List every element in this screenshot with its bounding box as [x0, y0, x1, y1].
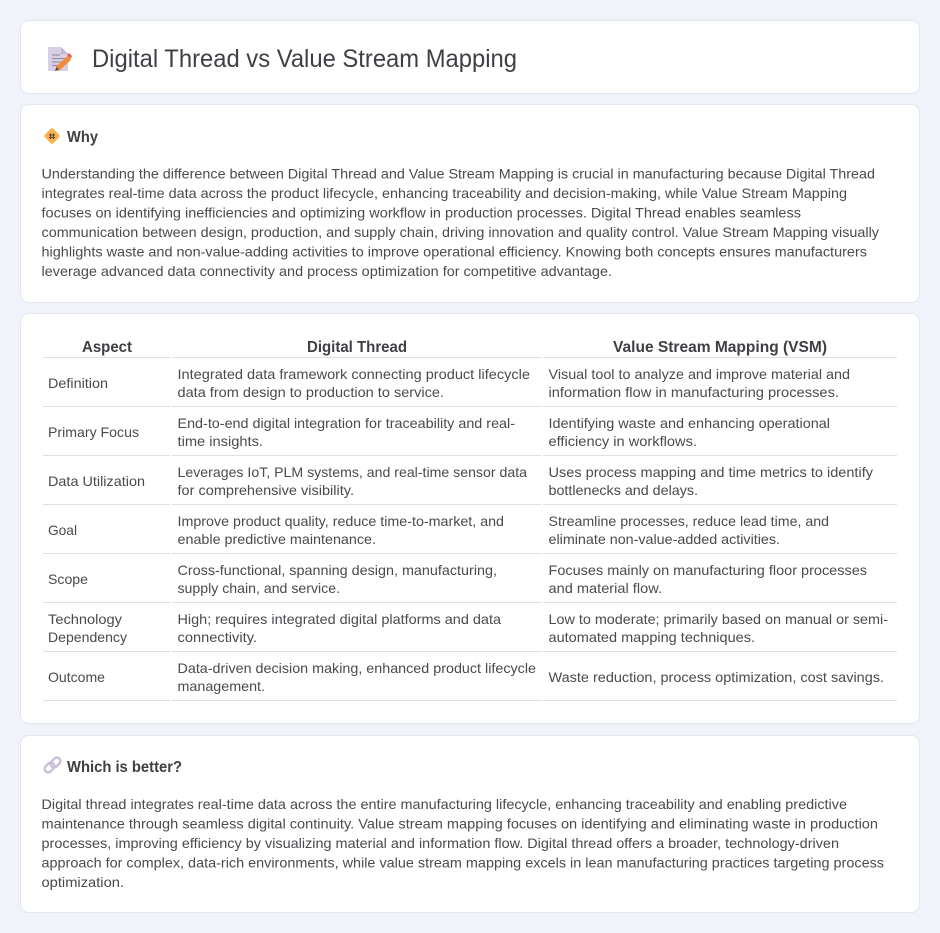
- table row: goal: enable predictive maintenance.: [178, 531, 376, 547]
- heading: why: Why: [67, 129, 98, 146]
- text block: why paragraph: integrates real-time data across the product lifecycle, enhancing traceability and decision-making, while Value Stream Mapping: [42, 185, 847, 201]
- table row: primary focus: End-to-end digital integration for traceability and real-: [178, 415, 515, 431]
- table header row: Aspect: [82, 339, 133, 356]
- table row: definition: data from design to production to service.: [178, 384, 444, 400]
- table row: primary focus: Identifying waste and enhancing operational: [548, 415, 830, 431]
- table row: definition: Integrated data framework connecting product lifecycle: [178, 366, 530, 382]
- table row: outcome: Outcome: [48, 669, 105, 685]
- table row: data utilization: for comprehensive visibility.: [178, 482, 354, 498]
- table row: technology dependency: Dependency: [48, 629, 127, 645]
- table row: scope: and material flow.: [548, 580, 662, 596]
- icon: orange diamond sign: [44, 128, 60, 144]
- table row: definition: Visual tool to analyze and improve material and: [548, 366, 850, 382]
- text block: why paragraph: Understanding the difference between Digital Thread and Value Stream Mapping is crucial in manufacturing because Digital Thread: [42, 166, 875, 182]
- table row: outcome: [48, 660, 884, 694]
- table header row: Value Stream Mapping (VSM): [613, 339, 827, 356]
- title: Digital Thread vs Value Stream Mapping: [92, 45, 517, 73]
- table row: scope: Focuses mainly on manufacturing floor processes: [548, 562, 867, 578]
- icon: chain link: [43, 756, 62, 774]
- table row: definition: Definition: [48, 375, 108, 391]
- table row: technology dependency: automated mapping techniques.: [548, 629, 755, 645]
- text block: why paragraph: highlights waste and non-value-adding activities to improve operational efficiency. Knowing both concepts ensures manufacturers: [42, 244, 867, 260]
- table row: technology dependency: High; requires integrated digital platforms and data: [178, 611, 501, 627]
- table header row: [82, 339, 827, 356]
- panel: why: [20, 104, 920, 302]
- table row: outcome: Data-driven decision making, enhanced product lifecycle: [178, 660, 536, 676]
- heading: which is better: Which is better?: [67, 759, 182, 776]
- panel: comparison table: [20, 314, 920, 724]
- table row: scope: supply chain, and service.: [178, 580, 340, 596]
- table row: technology dependency: Low to moderate; primarily based on manual or semi-: [548, 611, 888, 627]
- table row: primary focus: time insights.: [178, 433, 263, 449]
- table header row: Digital Thread: [307, 339, 407, 356]
- table row: data utilization: Uses process mapping and time metrics to identify: [548, 464, 873, 480]
- text block: which is better paragraph: processes, improving efficiency by visualizing material and information flow. Digital thread offers a broader, technology-driven: [42, 835, 839, 851]
- text block: which is better paragraph: approach for complex, data-rich environments, while value stream mapping excels in lean manufacturing practices targeting process: [42, 854, 884, 870]
- table row: outcome: Waste reduction, process optimization, cost savings.: [548, 669, 884, 685]
- table row: primary focus: Primary Focus: [48, 424, 139, 440]
- text block: which is better paragraph: optimization.: [42, 874, 124, 890]
- table row: scope: Scope: [48, 571, 88, 587]
- table row: goal: eliminate non-value-added activities.: [548, 531, 780, 547]
- table row: technology dependency: connectivity.: [178, 629, 257, 645]
- table row: definition: [48, 366, 850, 400]
- table row: data utilization: [48, 464, 873, 498]
- table row: data utilization: Data Utilization: [48, 473, 145, 489]
- text block: why paragraph: [42, 166, 879, 279]
- text block: why paragraph: communication between design, production, and supply chain, driving innovation and quality control. Value Stream Mapping visually: [42, 224, 879, 240]
- table row: definition: information flow in manufacturing processes.: [548, 384, 839, 400]
- table row: technology dependency: Technology: [48, 611, 122, 627]
- table row: goal: Streamline processes, reduce lead time, and: [548, 513, 829, 529]
- table row: data utilization: bottlenecks and delays.: [548, 482, 698, 498]
- table row: outcome: management.: [178, 678, 265, 694]
- table row: goal: [48, 513, 829, 547]
- table row: scope: Cross-functional, spanning design, manufacturing,: [178, 562, 497, 578]
- table row: data utilization: Leverages IoT, PLM systems, and real-time sensor data: [178, 464, 527, 480]
- text block: why paragraph: focuses on identifying inefficiencies and optimizing workflow in production processes. Digital Thread enables seamless: [42, 204, 801, 220]
- text block: why paragraph: leverage advanced data connectivity and process optimization for competitive advantage.: [42, 263, 612, 279]
- icon: document with pencil: [48, 47, 72, 71]
- panel: title header: [20, 20, 920, 94]
- table row: technology dependency: [48, 611, 888, 645]
- table row: primary focus: efficiency in workflows.: [548, 433, 697, 449]
- text block: which is better paragraph: [42, 796, 884, 890]
- table row: scope: [48, 562, 867, 596]
- table row: goal: Improve product quality, reduce time-to-market, and: [178, 513, 504, 529]
- table row: primary focus: [48, 415, 830, 449]
- text block: which is better paragraph: Digital thread integrates real-time data across the entire manufacturing lifecycle, enhancing traceability and enabling predictive: [42, 796, 847, 812]
- panel: which is better: [20, 736, 920, 912]
- table row: goal: Goal: [48, 522, 77, 538]
- text block: which is better paragraph: maintenance through seamless digital continuity. Value stream mapping focuses on identifying and eliminating waste in production: [42, 816, 878, 832]
